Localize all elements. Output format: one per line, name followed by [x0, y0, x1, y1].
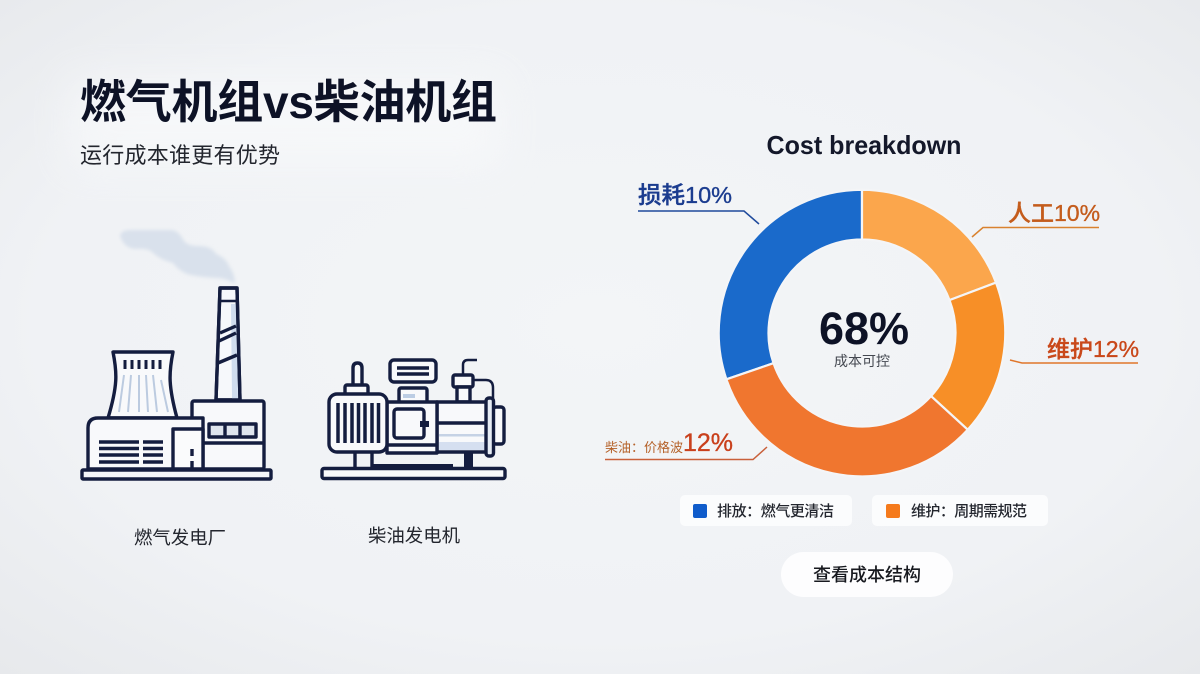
right building	[192, 401, 264, 469]
flange	[486, 398, 494, 456]
callout: 人工: 人工10%	[1008, 200, 1100, 226]
legend: 维护	[872, 495, 1048, 526]
left building	[88, 418, 203, 469]
callout: 柴油: 柴油：价格波	[605, 440, 683, 455]
segment: orange 维护	[931, 283, 1005, 430]
title: 燃气机组vs柴油机组	[80, 76, 497, 128]
callout: 人工	[972, 200, 1100, 237]
center caption: 成本可控	[834, 353, 890, 369]
smoke	[120, 230, 235, 284]
end cap	[493, 407, 504, 444]
pump body	[437, 402, 487, 452]
icon: gas power plant	[82, 230, 271, 479]
pipe	[463, 360, 493, 398]
callout: 维护: 维护12%	[1047, 336, 1139, 362]
label: gas plant: 燃气发电厂	[134, 527, 226, 548]
middle body	[387, 402, 437, 453]
segment: blue 损耗	[719, 190, 862, 379]
base	[322, 468, 505, 478]
feet	[355, 453, 372, 468]
legend: 排放	[680, 495, 852, 526]
legend: 维护: 维护：周期需规范	[911, 503, 1027, 520]
control box	[399, 388, 427, 403]
base	[82, 470, 271, 479]
callout: 损耗	[638, 182, 759, 224]
segment: light orange 人工	[862, 190, 996, 300]
center value: 68%	[819, 303, 909, 354]
callout: 柴油: 12%	[683, 429, 733, 457]
segment: deep orange 柴油	[726, 363, 968, 476]
stem	[353, 363, 362, 385]
door	[173, 429, 203, 469]
subtitle: 运行成本谁更有优势	[80, 143, 280, 168]
cooling tower	[108, 352, 177, 418]
button	[781, 552, 953, 597]
callout: 柴油	[605, 429, 767, 460]
label: diesel generator: 柴油发电机	[368, 525, 460, 546]
chart heading: Cost breakdown	[766, 130, 962, 160]
icon: diesel generator	[322, 360, 505, 478]
legend: 排放: 排放：燃气更清洁	[717, 502, 834, 520]
motor	[329, 394, 387, 452]
valve	[453, 375, 473, 402]
button: 查看成本结构	[813, 565, 921, 585]
display	[390, 360, 436, 382]
donut chart	[719, 190, 1005, 476]
chimney	[216, 288, 240, 400]
callout: 损耗: 损耗10%	[638, 182, 732, 208]
callout: 维护	[1010, 336, 1139, 363]
